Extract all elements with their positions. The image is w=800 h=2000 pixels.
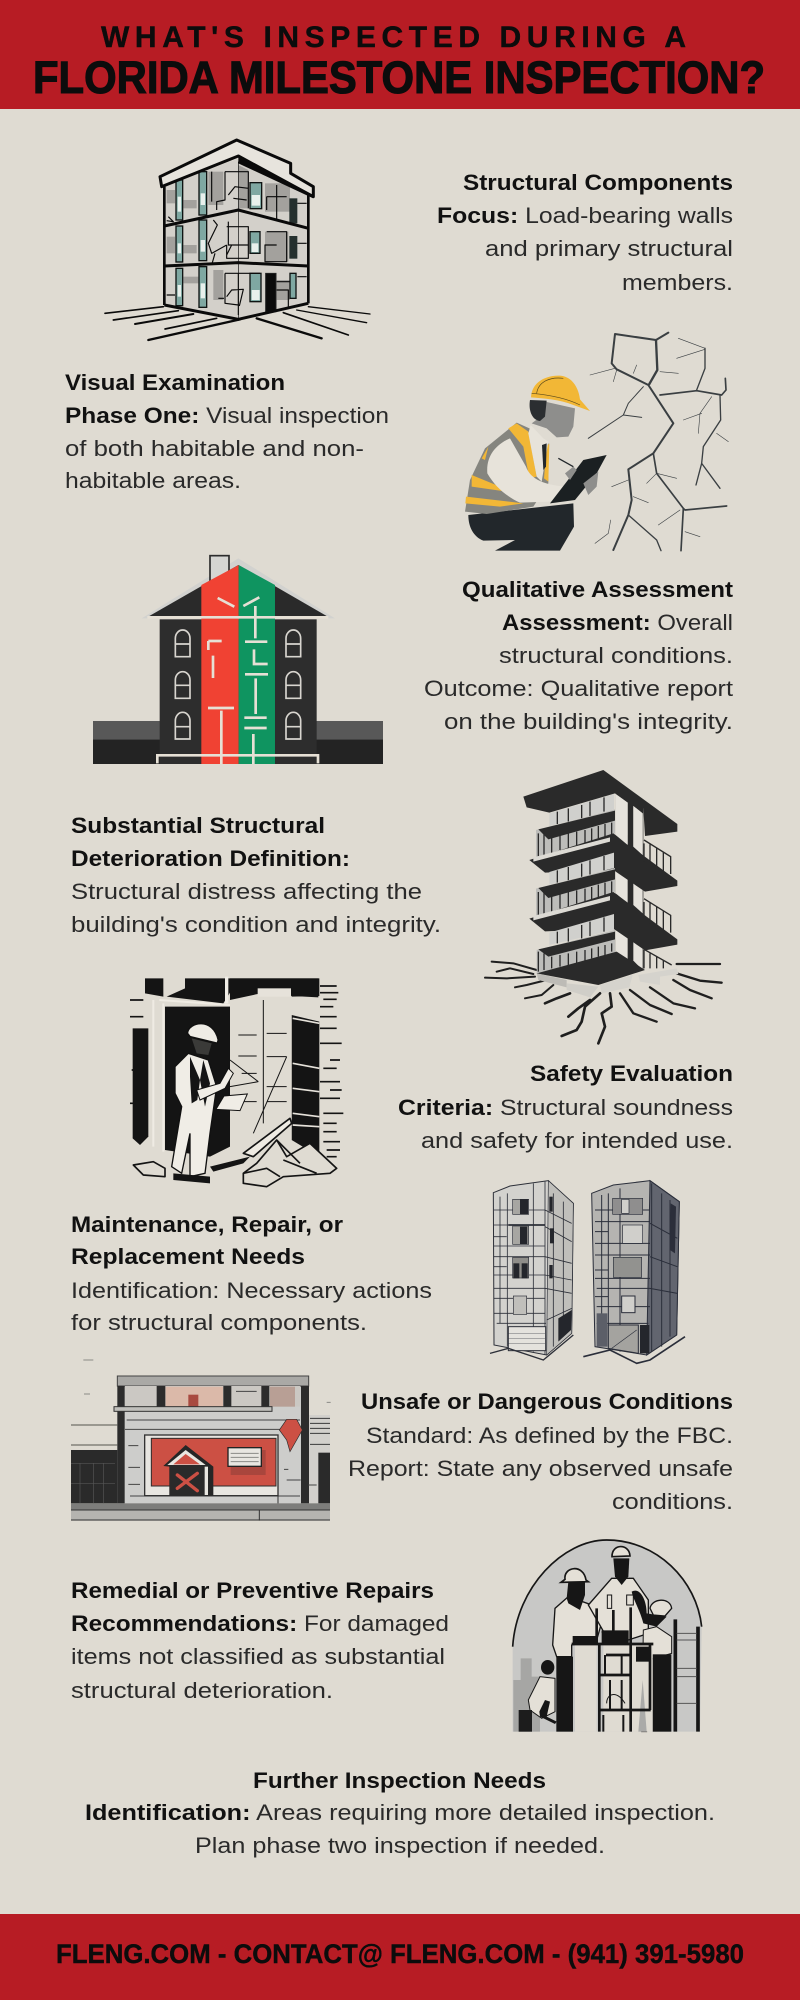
footer banner bbox=[0, 1914, 800, 2000]
body: Report: State any observed unsafe bbox=[348, 1456, 733, 1481]
text: structural components bbox=[437, 170, 733, 295]
heading: Deterioration Definition: bbox=[71, 846, 350, 871]
rubble bbox=[133, 1118, 337, 1187]
body: Focus: Load-bearing walls bbox=[437, 203, 733, 228]
body: members. bbox=[622, 270, 733, 295]
ground cracks bbox=[485, 962, 722, 1043]
inspector figure bbox=[172, 1024, 247, 1183]
text: unsafe or dangerous conditions bbox=[348, 1389, 733, 1514]
body: and primary structural bbox=[485, 236, 733, 261]
heading: Remedial or Preventive Repairs bbox=[71, 1578, 434, 1603]
heading: Safety Evaluation bbox=[530, 1061, 733, 1086]
body: Identification: Necessary actions bbox=[71, 1278, 432, 1303]
illustration: multi-storey building on cracked ground bbox=[485, 770, 722, 1043]
heading: Maintenance, Repair, or bbox=[71, 1212, 343, 1237]
body bbox=[437, 203, 733, 295]
illustration: two apartment towers bbox=[490, 1181, 685, 1363]
left tower bbox=[490, 1181, 573, 1360]
body: Recommendations: For damaged bbox=[71, 1611, 449, 1636]
body: Criteria: Structural soundness bbox=[398, 1095, 733, 1120]
body: building's condition and integrity. bbox=[71, 912, 441, 937]
text: visual examination bbox=[65, 370, 389, 493]
body: Assessment: Overall bbox=[502, 610, 733, 635]
body bbox=[85, 1800, 715, 1858]
illustration: repair crew under arch bbox=[513, 1540, 702, 1732]
body: Standard: As defined by the FBC. bbox=[366, 1423, 733, 1448]
body bbox=[65, 403, 389, 493]
heading: Substantial Structural bbox=[71, 813, 325, 838]
heading: Visual Examination bbox=[65, 370, 285, 395]
body bbox=[424, 610, 734, 734]
body: Identification: Areas requiring more detailed inspection. bbox=[85, 1800, 715, 1825]
body: on the building's integrity. bbox=[444, 709, 733, 734]
body: and safety for intended use. bbox=[421, 1128, 733, 1153]
floors bbox=[529, 794, 677, 892]
body: structural deterioration. bbox=[71, 1678, 333, 1703]
heading: Qualitative Assessment bbox=[462, 577, 734, 602]
heading bbox=[71, 813, 350, 871]
body: Structural distress affecting the bbox=[71, 879, 422, 904]
scaffold bbox=[556, 1607, 698, 1732]
cracks bbox=[588, 333, 728, 551]
warning house bbox=[163, 1445, 213, 1496]
heading: Further Inspection Needs bbox=[253, 1768, 546, 1793]
contact line: FLENG.COM - CONTACT@ FLENG.COM - (941) 391-5980 bbox=[56, 1939, 744, 1969]
heading: Structural Components bbox=[463, 170, 733, 195]
heading: Replacement Needs bbox=[71, 1244, 305, 1269]
worker left bbox=[553, 1569, 608, 1657]
body bbox=[71, 879, 441, 937]
illustration: storefront with warning house sign bbox=[71, 1360, 331, 1521]
body: Phase One: Visual inspection bbox=[65, 403, 389, 428]
illustration: inspector in damaged building bbox=[130, 977, 343, 1187]
worker crouching bbox=[519, 1660, 557, 1732]
title line two: FLORIDA MILESTONE INSPECTION? bbox=[33, 52, 765, 103]
body: of both habitable and non- bbox=[65, 436, 364, 461]
worker centre bbox=[588, 1547, 648, 1640]
text: qualitative assessment bbox=[424, 577, 734, 734]
header banner bbox=[0, 0, 800, 109]
body: Outcome: Qualitative report bbox=[424, 676, 734, 701]
text: safety evaluation bbox=[398, 1061, 733, 1153]
heading bbox=[71, 1212, 343, 1269]
heading: Unsafe or Dangerous Conditions bbox=[361, 1389, 733, 1414]
text: maintenance, repair, or replacement bbox=[71, 1212, 432, 1335]
illustration: cracked building bbox=[105, 140, 370, 340]
body bbox=[71, 1611, 449, 1703]
worker figure bbox=[465, 376, 607, 551]
illustration: worker inspecting cracked wall bbox=[465, 333, 728, 551]
body bbox=[398, 1095, 733, 1153]
body: Plan phase two inspection if needed. bbox=[195, 1833, 605, 1858]
body: structural conditions. bbox=[499, 643, 733, 668]
right tower bbox=[583, 1181, 685, 1363]
body: conditions. bbox=[612, 1489, 733, 1514]
body: habitable areas. bbox=[65, 468, 241, 493]
text: further inspection needs bbox=[85, 1768, 715, 1858]
text: substantial structural deterioration bbox=[71, 813, 441, 937]
worker right bbox=[632, 1591, 672, 1732]
body: items not classified as substantial bbox=[71, 1644, 445, 1669]
body bbox=[348, 1423, 733, 1514]
body: for structural components. bbox=[71, 1310, 367, 1335]
text: remedial or preventive repairs bbox=[71, 1578, 449, 1703]
illustration: house cross-section bbox=[93, 556, 383, 764]
body bbox=[71, 1278, 432, 1335]
title line one: WHAT'S INSPECTED DURING A bbox=[101, 21, 686, 54]
